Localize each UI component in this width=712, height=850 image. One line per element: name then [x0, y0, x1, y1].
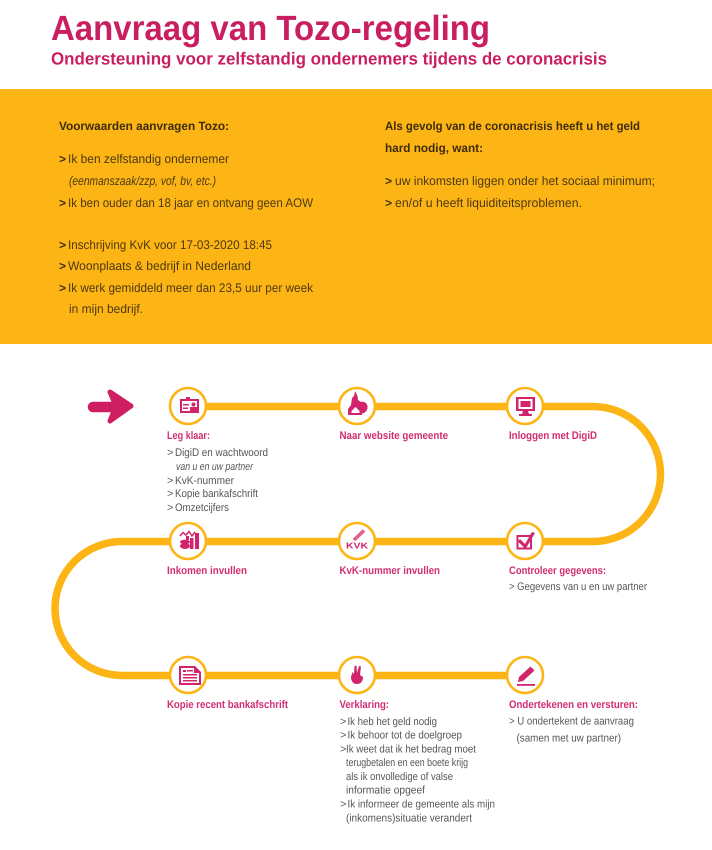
list: leg klaar: > [167, 475, 173, 487]
label: naar website gemeente: Naar website gemeente [340, 430, 448, 442]
heading: reden: Als gevolg van de coronacrisis heeft u het geld [385, 119, 640, 133]
icon: id card [180, 397, 199, 413]
list: reden: > [385, 196, 392, 210]
list: voorwaarden: > [59, 196, 66, 210]
label: inloggen met digid: Inloggen met DigiD [509, 430, 597, 442]
list: voorwaarden: > [59, 152, 66, 166]
list: verklaring: Ik informeer de gemeente als mijn [348, 798, 495, 810]
list: leg klaar: Omzetcijfers [175, 502, 229, 514]
label: verklaring: Verklaring: [340, 699, 389, 711]
list: voorwaarden [59, 152, 314, 316]
step 2: naar website gemeente [339, 388, 448, 442]
icon: bank statement [179, 666, 201, 685]
step 1: leg klaar [167, 388, 268, 514]
list: ondertekenen: > U ondertekent de aanvraag [509, 716, 634, 728]
list: verklaring: (inkomens)situatie verandert [346, 812, 472, 824]
list: verklaring: als ik onvolledige of valse [346, 771, 453, 783]
label: kopie recent bankafschrift: Kopie recent bankafschrift [167, 699, 288, 711]
list: reden: en/of u heeft liquiditeitsproblemen. [395, 196, 582, 210]
list: verklaring: > [340, 730, 346, 742]
list: verklaring: terugbetalen en een boete krijg [346, 757, 468, 769]
list: voorwaarden: Ik ben ouder dan 18 jaar en ontvang geen AOW [68, 196, 313, 210]
list: leg klaar: > [167, 447, 173, 459]
text: gegevens: > Gegevens van u en uw partner [509, 581, 647, 593]
label: leg klaar: Leg klaar: [167, 430, 210, 442]
list: verklaring: > [340, 798, 346, 810]
panel: conditions band [0, 89, 712, 344]
step 6: inkomen invullen [167, 523, 247, 577]
step 7: kopie recent bankafschrift [167, 657, 288, 711]
title: Aanvraag van Tozo-regeling [51, 9, 490, 48]
list: voorwaarden: > [59, 259, 66, 273]
icon: coins and bars [180, 532, 199, 549]
list: voorwaarden: > [59, 281, 66, 295]
list: reden [385, 174, 655, 210]
step 3: inloggen met digid [507, 388, 597, 442]
list: voorwaarden: Inschrijving KvK voor 17-03-2020 18:45 [68, 238, 272, 252]
arrow: start [93, 392, 131, 421]
list: verklaring: > [340, 716, 346, 728]
step 5: kvk-nummer invullen [339, 523, 440, 577]
list: leg klaar: Kopie bankafschrift [175, 488, 258, 500]
list: verklaring: Ik weet dat ik het bedrag moet [346, 744, 476, 756]
list: leg klaar: > [167, 502, 173, 514]
subtitle: Ondersteuning voor zelfstandig ondernemers tijdens de coronacrisis [51, 48, 607, 68]
list: reden: uw inkomsten liggen onder het sociaal minimum; [395, 174, 655, 188]
list: voorwaarden: Woonplaats & bedrijf in Nederland [68, 259, 251, 273]
icon: computer monitor [516, 397, 535, 416]
text block: reden [385, 119, 655, 210]
step 4: controleer gegevens [507, 523, 647, 593]
list: leg klaar: van u en uw partner [176, 461, 254, 473]
text block: voorwaarden [59, 119, 314, 316]
list: verklaring: Ik behoor tot de doelgroep [348, 730, 462, 742]
label: kvk-nummer invullen: KvK-nummer invullen [340, 565, 440, 577]
heading: voorwaarden: Voorwaarden aanvragen Tozo: [59, 119, 229, 133]
label: inkomen invullen: Inkomen invullen [167, 565, 247, 577]
list: leg klaar [167, 447, 268, 514]
winding route path [55, 406, 660, 676]
list: reden: > [385, 174, 392, 188]
icon: pen signing [517, 666, 535, 686]
icon: oath hand [351, 666, 363, 684]
step 8: verklaring [339, 657, 495, 824]
list: voorwaarden: in mijn bedrijf. [69, 302, 143, 316]
list: verklaring: informatie opgeef [346, 784, 426, 796]
icon: kvk pencil: KVK [346, 540, 369, 550]
text block: reden: hard nodig, want: [385, 141, 483, 155]
list: voorwaarden: Ik ben zelfstandig ondernemer [68, 152, 229, 166]
list: leg klaar: KvK-nummer [175, 475, 234, 487]
icon: town hall [348, 391, 368, 415]
step 9: ondertekenen en versturen [507, 657, 638, 744]
list: verklaring: > [340, 744, 346, 756]
list: voorwaarden: (eenmanszaak/zzp, vof, bv, etc.) [69, 174, 216, 188]
list: ondertekenen [509, 716, 634, 744]
label: controleer gegevens: Controleer gegevens: [509, 565, 606, 577]
list: leg klaar: DigiD en wachtwoord [175, 447, 268, 459]
label: ondertekenen en versturen: Ondertekenen en versturen: [509, 699, 638, 711]
list: verklaring: Ik heb het geld nodig [348, 716, 437, 728]
list: verklaring [340, 716, 495, 824]
list: ondertekenen: (samen met uw partner) [516, 732, 621, 744]
icon: checkbox [518, 532, 535, 549]
list: leg klaar: > [167, 488, 173, 500]
list: voorwaarden: > [59, 238, 66, 252]
list: voorwaarden: Ik werk gemiddeld meer dan 23,5 uur per week [68, 281, 314, 295]
